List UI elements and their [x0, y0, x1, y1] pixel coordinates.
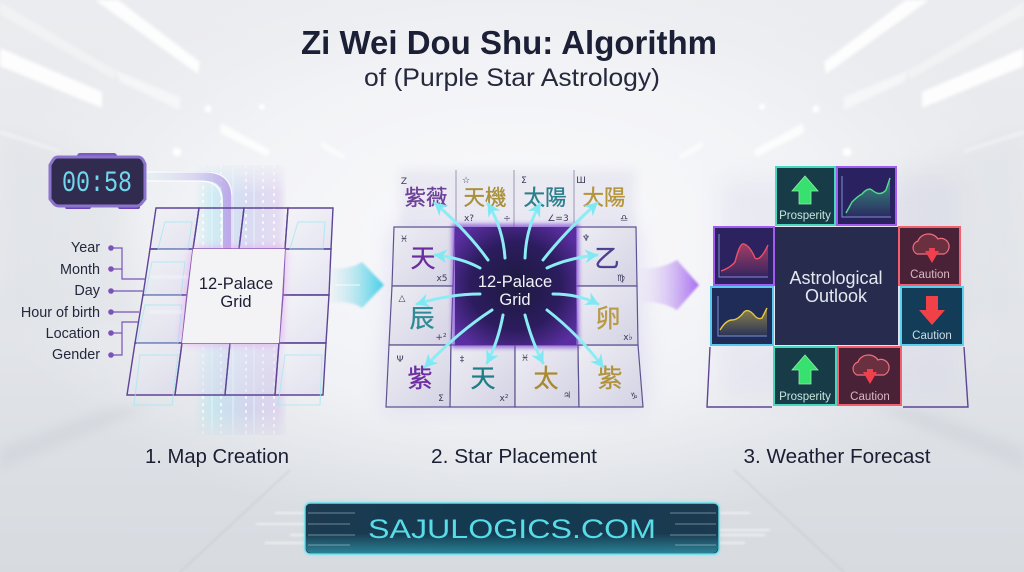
empty cells: [707, 347, 968, 407]
small symbols: ♓: [400, 235, 408, 245]
star names: 卵: [595, 305, 621, 333]
small symbols: ♓: [521, 354, 529, 364]
small symbols: Σ: [438, 394, 444, 404]
small symbols: +²: [435, 333, 447, 343]
step labels: [145, 445, 931, 468]
center: astrological outlook: Astrological: [789, 268, 883, 288]
cell: prosperity top: Prosperity: [779, 210, 831, 222]
cell: green chart: [837, 167, 896, 225]
small symbols: ♑: [630, 392, 638, 402]
small symbols: x♭: [623, 333, 633, 343]
cell: caution arrow right: [901, 287, 963, 345]
palace cells: [386, 227, 643, 407]
birth inputs list: Day: [74, 283, 101, 299]
panel: map creation: [21, 153, 333, 435]
cell: caution cloud bottom: Caution: [850, 391, 890, 403]
step labels: 1. Map Creation: [145, 445, 289, 468]
label: 12-palace grid center: 12-Palace: [478, 273, 552, 291]
birth inputs list: [21, 240, 146, 363]
small symbols: Ш: [576, 176, 586, 186]
star names: 乙: [594, 245, 620, 273]
cell: caution arrow right: Caution: [912, 330, 952, 342]
cell: caution cloud bottom: [838, 347, 901, 405]
step labels: 2. Star Placement: [431, 445, 597, 468]
cell: prosperity top: [776, 167, 835, 225]
cell: red chart: [714, 227, 774, 285]
radiating arrows: [417, 203, 603, 367]
small symbols: x5: [436, 274, 448, 284]
small symbols: x²: [500, 394, 509, 404]
label: 12-palace grid: [199, 275, 273, 311]
small symbols: ‡: [460, 355, 465, 365]
cell: prosperity bottom: Prosperity: [779, 391, 831, 403]
small symbols: ÷: [503, 214, 511, 224]
small symbols: ☆: [462, 176, 470, 186]
small symbols: x?: [464, 214, 474, 224]
small symbols: Z: [401, 177, 407, 187]
label: 12-palace grid center: Grid: [499, 291, 531, 309]
star names: 紫: [597, 365, 623, 393]
small symbols: ♃: [563, 391, 571, 401]
small symbols: Ψ: [396, 355, 404, 365]
banner: sajulogics.com: [256, 503, 770, 554]
center cell: [182, 249, 285, 343]
star names: 太: [533, 365, 559, 393]
center: astrological outlook: Outlook: [805, 286, 868, 306]
small symbols: ♍: [617, 274, 625, 284]
star names: 紫薇: [404, 186, 448, 210]
label: 12-palace grid: Grid: [220, 293, 252, 311]
star names: 紫: [407, 365, 433, 393]
title: of (Purple Star Astrology): [364, 64, 660, 92]
cell: caution cloud right: [899, 227, 960, 285]
small symbols: ♆: [582, 234, 590, 244]
panel: star placement: [386, 170, 643, 407]
birth inputs list: Hour of birth: [21, 305, 100, 321]
birth inputs list: Year: [71, 240, 100, 256]
star names: [404, 186, 626, 393]
label: 12-palace grid: 12-Palace: [199, 275, 273, 293]
star names: 大陽: [582, 186, 626, 210]
small symbols: Σ: [521, 176, 527, 186]
center: astrological outlook: [775, 227, 898, 345]
small symbols: [396, 176, 638, 404]
birth inputs list: Month: [60, 262, 100, 278]
title: Zi Wei Dou Shu: Algorithm: [301, 25, 717, 62]
star names: 天: [470, 365, 496, 393]
small symbols: △: [399, 294, 406, 304]
panel: weather forecast: [707, 167, 968, 407]
star names: 天: [410, 245, 436, 273]
title: [301, 25, 717, 92]
birth inputs list: Location: [46, 326, 100, 342]
step labels: 3. Weather Forecast: [744, 445, 931, 468]
12-palace grid, perspective: [127, 208, 333, 395]
star names: 天機: [463, 186, 507, 210]
icon: digital clock: [50, 153, 145, 209]
data stream behind grid: [195, 165, 287, 435]
cell: caution cloud right: Caution: [910, 269, 950, 281]
small symbols: ♎: [620, 214, 628, 224]
small symbols: ∠=3: [547, 214, 569, 224]
banner: sajulogics.com: SAJULOGICS.COM: [368, 514, 656, 544]
cell: yellow chart: [711, 287, 773, 345]
center core: [452, 224, 579, 348]
star names: 辰: [409, 305, 435, 333]
clock wires: [146, 172, 232, 250]
birth inputs list: Gender: [52, 347, 100, 363]
cell: prosperity bottom: [774, 347, 836, 405]
icon: digital clock: 00:58: [62, 167, 132, 201]
label: 12-palace grid center: [478, 273, 552, 309]
arrow: map to placement: [330, 262, 384, 308]
star names: 太陽: [523, 186, 567, 210]
arrow: placement to forecast: [641, 260, 699, 310]
